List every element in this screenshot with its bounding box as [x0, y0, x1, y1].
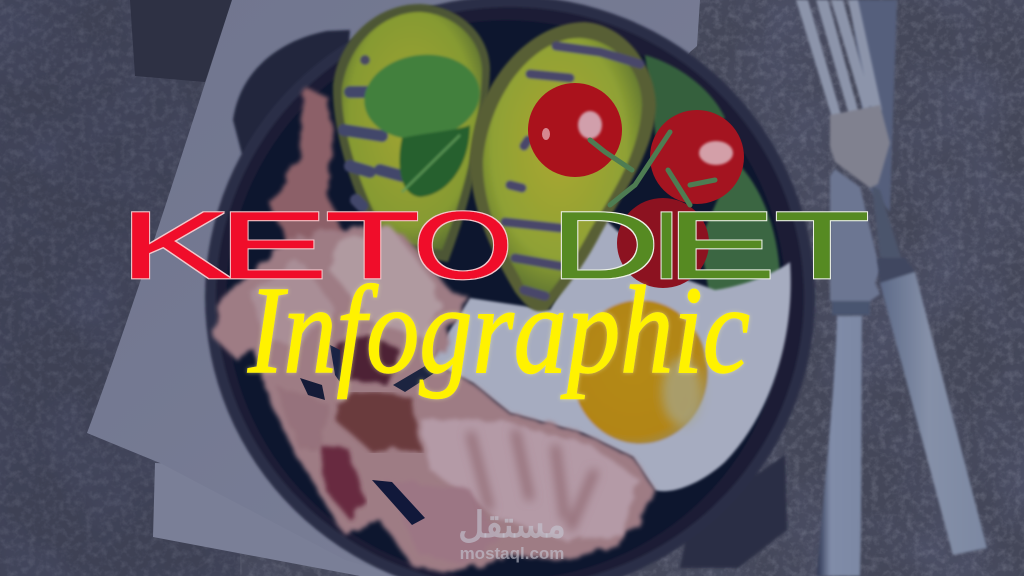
- bacon: dark gaps: [393, 362, 436, 392]
- title: DIET: [550, 193, 870, 299]
- tomatoes: [528, 83, 744, 288]
- title: DIET: D: [550, 193, 660, 299]
- spinach leaves behind: [645, 55, 780, 311]
- title: DIET: T: [774, 193, 870, 299]
- skillet: [205, 0, 815, 576]
- title: KETO: E: [218, 193, 328, 299]
- watermark: mostaql logo: مستقل: [458, 504, 566, 545]
- title: DIET: I: [653, 193, 680, 299]
- fried egg: [430, 215, 791, 491]
- title: KETO: O: [413, 193, 513, 299]
- spinach on avocado: [359, 47, 485, 147]
- subtitle: Infographic: Infographic: [247, 262, 750, 400]
- bacon: [213, 85, 655, 570]
- avocado left: [333, 4, 490, 262]
- watermark: mostaql logo: mostaql.com: [460, 544, 564, 563]
- napkin: [87, 0, 700, 576]
- bacon: main pile: [213, 224, 655, 570]
- bacon: upper strip: [268, 85, 345, 270]
- watermark: mostaql logo: [458, 504, 566, 563]
- title: KETO: K: [119, 193, 231, 299]
- title: KETO: [119, 193, 513, 299]
- cutlery: knife: [817, 0, 897, 576]
- title: KETO: T: [325, 193, 420, 299]
- title: DIET: E: [666, 193, 776, 299]
- cutlery: fork: [796, 0, 987, 555]
- avocado right: [470, 22, 656, 312]
